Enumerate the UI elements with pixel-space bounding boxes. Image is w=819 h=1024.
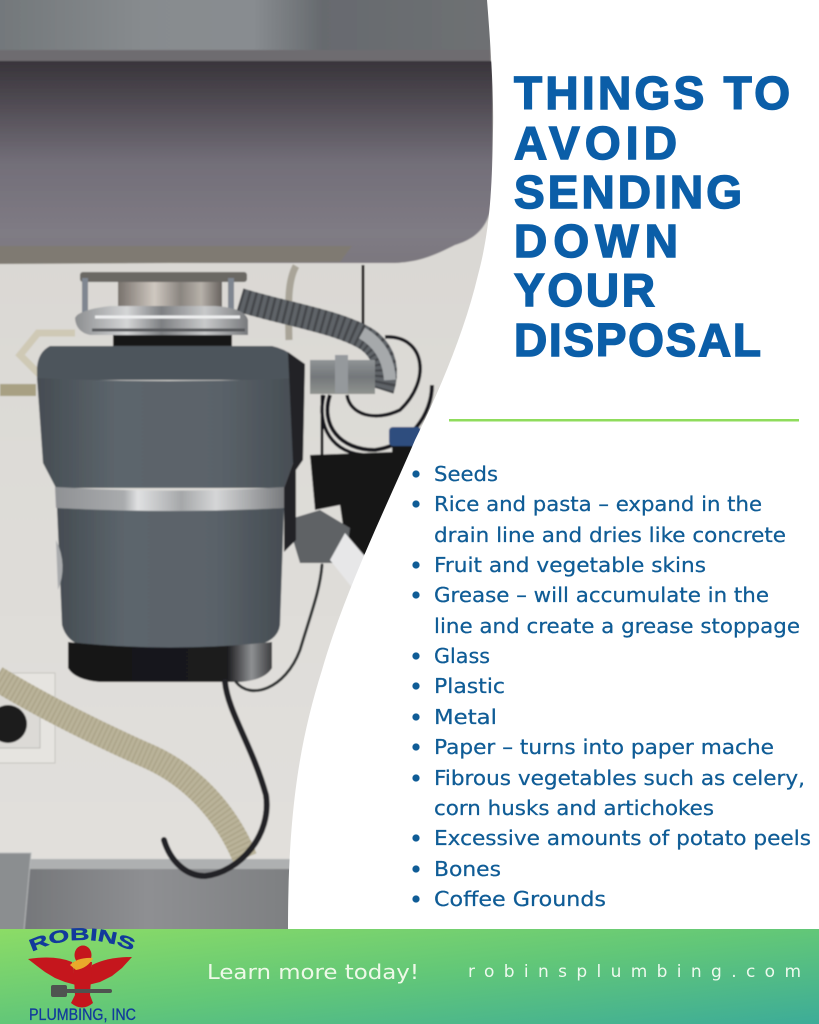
black power cord (164, 565, 322, 876)
black drain fitting (287, 427, 421, 600)
counter shelf (0, 853, 295, 931)
call to action text: Learn more today! (207, 960, 419, 984)
wall background (0, 0, 500, 932)
bullet list: line and create a grease stoppage (434, 614, 800, 638)
grey corrugated hose (240, 300, 390, 394)
bullet list: Bones (434, 857, 501, 881)
footer banner (0, 929, 819, 1024)
bullet list: Fibrous vegetables such as celery, (434, 766, 805, 790)
bullet markers (412, 470, 420, 902)
title (514, 67, 790, 366)
icon: red bird with wrench (28, 946, 132, 1008)
bullet list (412, 462, 811, 911)
bullet list: Fruit and vegetable skins (434, 553, 706, 577)
logo: Robins Plumbing: PLUMBING, INC (29, 1005, 136, 1024)
bullet list: Seeds (434, 462, 498, 486)
bullet list: Metal (434, 705, 497, 729)
back pipes and cords (0, 265, 432, 470)
mounting flange (75, 272, 248, 346)
title: YOUR (514, 264, 655, 316)
photo: disposal under a sink (0, 0, 500, 932)
title: DISPOSAL (514, 314, 761, 366)
title: SENDING (514, 166, 742, 218)
title: AVOID (514, 117, 677, 169)
white curved text panel (288, 0, 819, 929)
title: THINGS TO (514, 67, 790, 119)
green divider line (449, 419, 799, 422)
bullet list: Coffee Grounds (434, 887, 606, 911)
bullet list: drain line and dries like concrete (434, 523, 786, 547)
bullet list: Glass (434, 644, 490, 668)
wall socket (0, 673, 55, 763)
website address: robinsplumbing.com (468, 962, 801, 982)
beige drain hose (0, 678, 245, 858)
sink basin (0, 0, 493, 264)
bullet list: Paper – turns into paper mache (434, 735, 774, 759)
disposal body (37, 346, 305, 682)
logo: Robins Plumbing (28, 928, 136, 1024)
title: DOWN (514, 215, 678, 267)
bullet list: Excessive amounts of potato peels (434, 826, 811, 850)
bullet list: Rice and pasta – expand in the (434, 492, 762, 516)
logo: Robins Plumbing: ROBINS (28, 928, 134, 952)
bullet list: Grease – will accumulate in the (434, 583, 769, 607)
bullet list: corn husks and artichokes (434, 796, 714, 820)
bullet list: Plastic (434, 674, 505, 698)
